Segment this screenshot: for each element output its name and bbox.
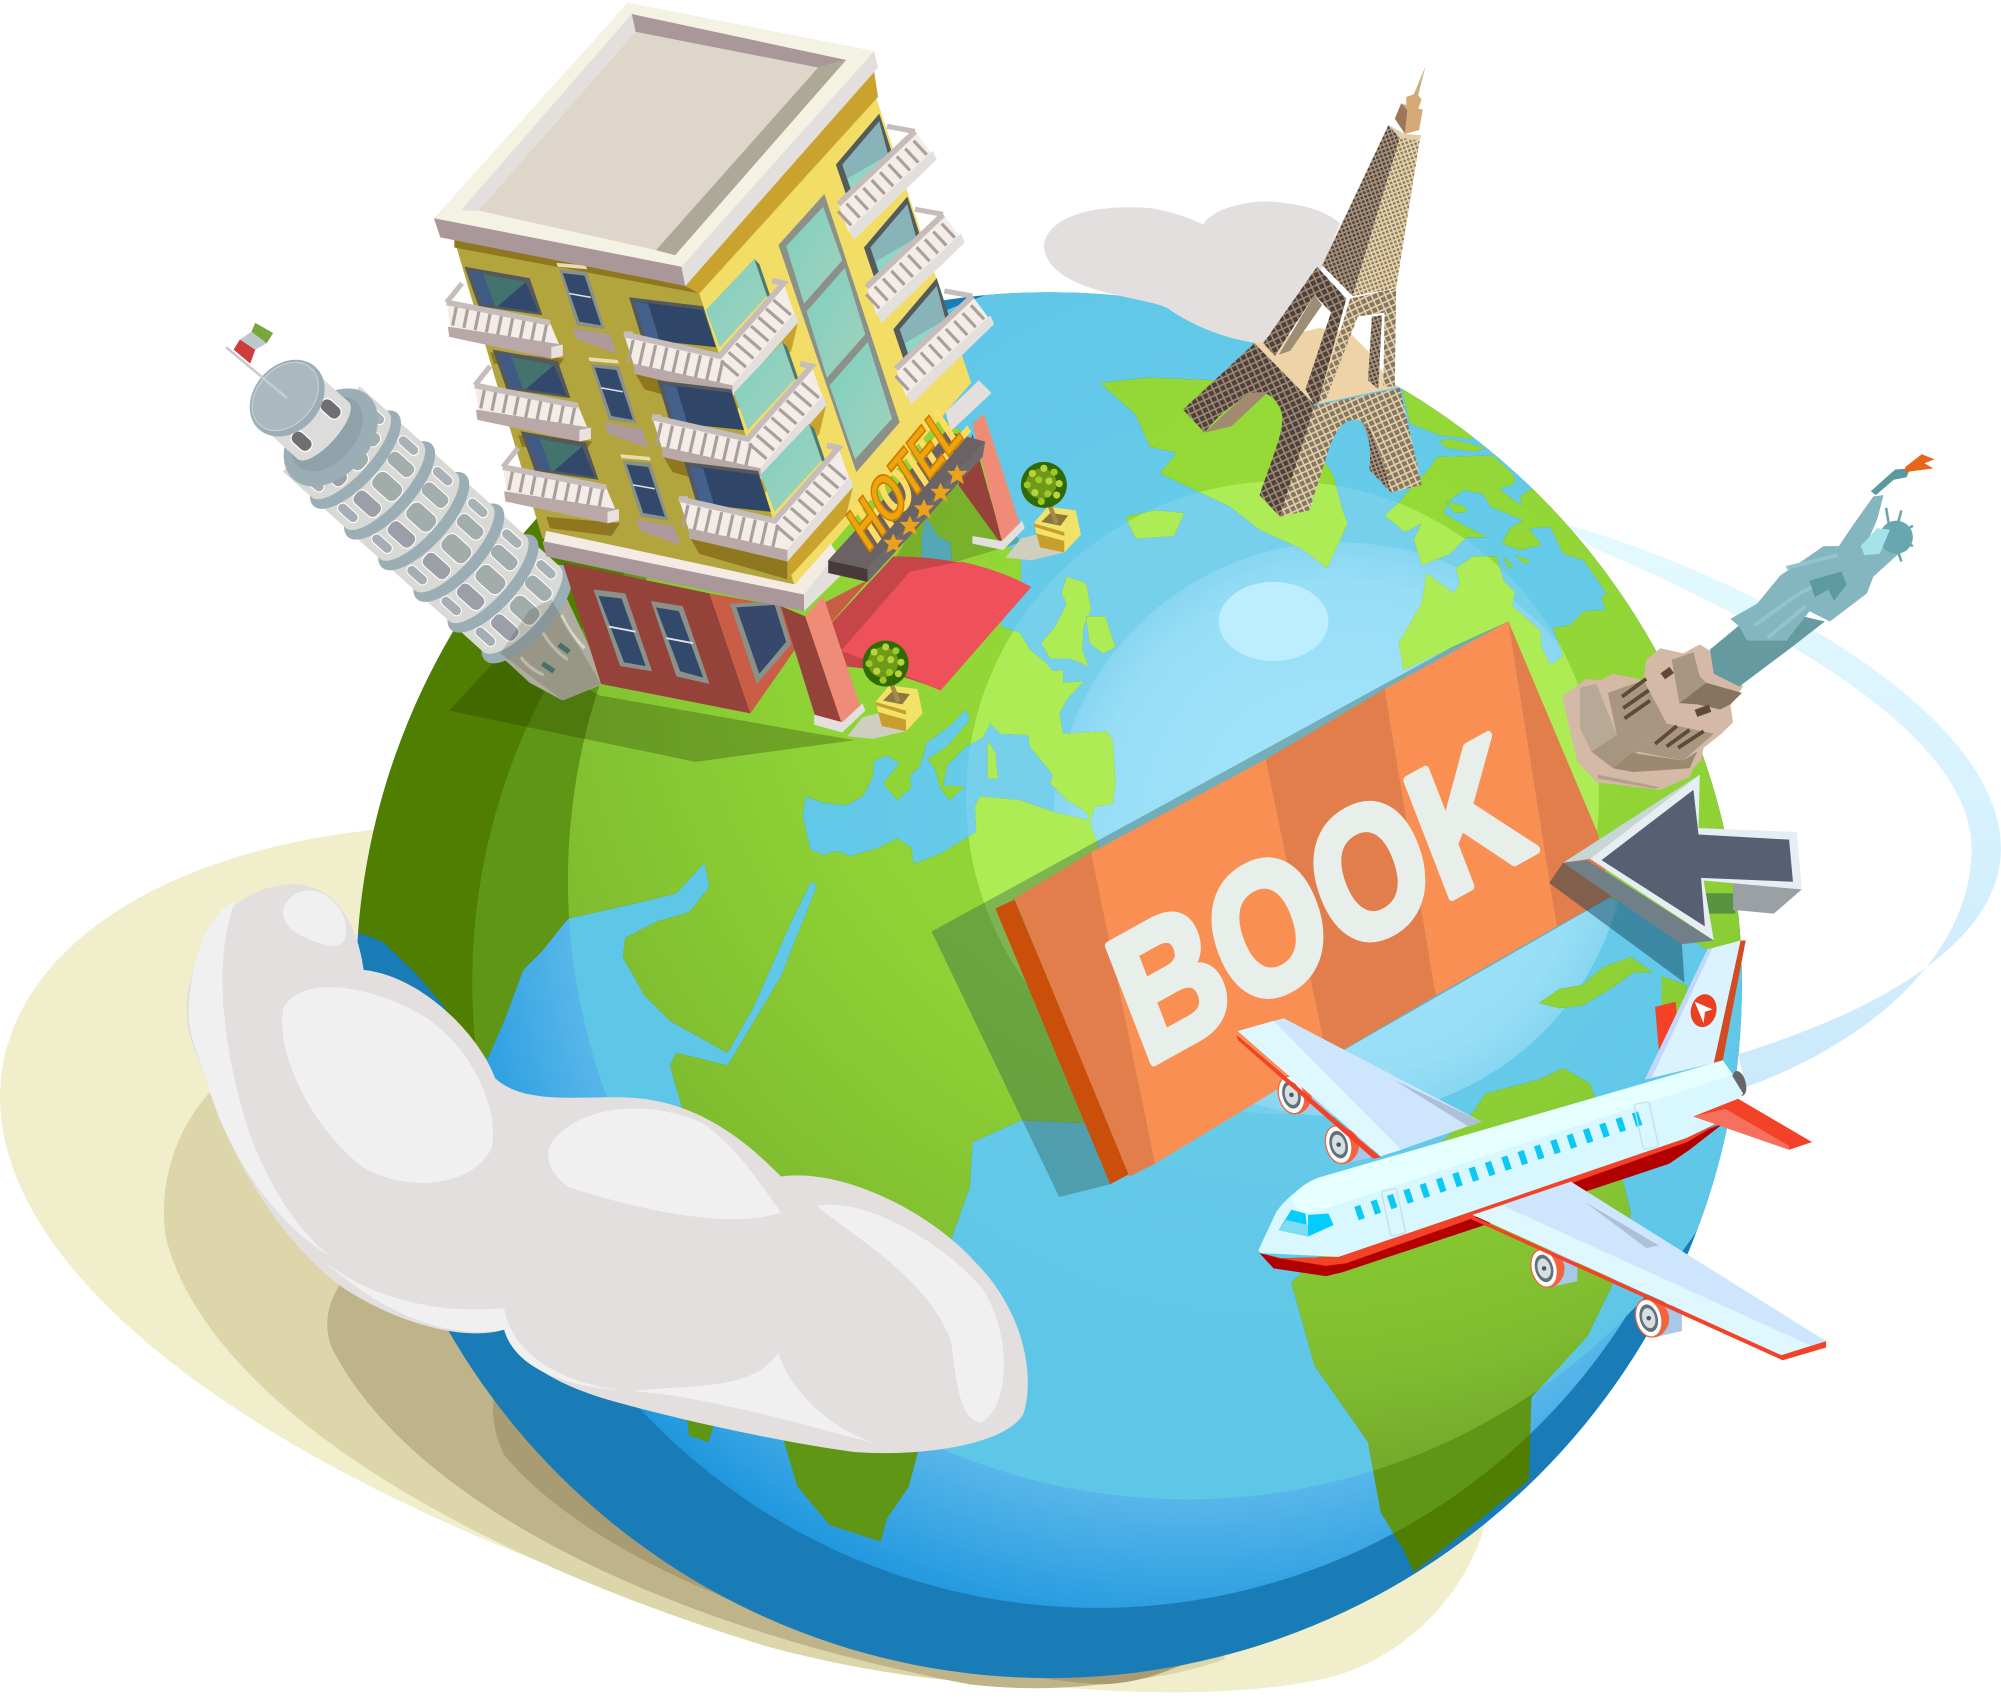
arrow face xyxy=(1590,775,1802,940)
upper floors left wall xyxy=(454,240,795,587)
eave shadow xyxy=(685,71,878,293)
roof top edge xyxy=(434,3,874,267)
roof inner wall left xyxy=(461,14,636,211)
right stabilizer xyxy=(1693,1099,1812,1150)
summit platform xyxy=(1388,125,1422,140)
continents xyxy=(358,378,1740,1572)
tail fin xyxy=(1645,940,1746,1080)
tail cone xyxy=(1730,1069,1749,1097)
mid-floor trim xyxy=(542,380,992,611)
tower galleries xyxy=(279,382,587,677)
tower top ring xyxy=(265,370,397,505)
pedestal base xyxy=(1562,644,1743,790)
near wing xyxy=(1470,1182,1826,1360)
rear pillar xyxy=(958,413,1025,550)
side balconies xyxy=(836,114,994,405)
cloud highlights xyxy=(189,891,1004,1445)
arrow sides xyxy=(1563,775,1802,944)
roof front edge xyxy=(434,218,685,286)
narrow windows xyxy=(556,263,680,545)
roof inner shadow xyxy=(656,60,846,255)
tower body xyxy=(221,329,587,677)
inner arch lower xyxy=(1362,421,1391,493)
book spine xyxy=(995,900,1129,1184)
front pillar xyxy=(781,596,865,732)
cloud body xyxy=(186,884,1028,1453)
corner balconies xyxy=(624,259,854,579)
engines on near wing xyxy=(1527,1247,1682,1340)
antenna xyxy=(1413,66,1425,97)
ground floor right wall xyxy=(710,593,795,713)
airplane xyxy=(1237,940,1826,1360)
Eiffel tower xyxy=(1183,66,1425,517)
ground shadow xyxy=(0,829,1487,1692)
far wing xyxy=(1237,1018,1482,1159)
tablet xyxy=(1810,572,1847,601)
engines on far wing xyxy=(1274,1073,1372,1166)
torch xyxy=(1871,468,1910,495)
roof side edge xyxy=(681,51,878,286)
upper floors right wall xyxy=(699,80,971,587)
summit blocks xyxy=(1395,93,1423,134)
shaft right face xyxy=(1353,137,1420,296)
first platform xyxy=(1254,328,1400,405)
potted tree left xyxy=(847,641,923,739)
ocean highlight xyxy=(1219,582,1328,661)
cabin windows xyxy=(1357,1115,1649,1214)
front cloud xyxy=(186,884,1028,1453)
leaning tower of Pisa xyxy=(221,329,606,701)
sign stars xyxy=(883,464,967,553)
roof floor xyxy=(479,32,818,250)
roof inner wall back xyxy=(632,14,846,68)
orbit ring xyxy=(1567,524,2001,1087)
fuselage xyxy=(1258,1060,1743,1257)
belfry xyxy=(234,345,362,471)
doors xyxy=(1381,1101,1658,1236)
arrow shadow xyxy=(1549,863,1736,983)
left leg lower xyxy=(1183,343,1314,517)
book cover bands xyxy=(1015,852,1155,1177)
shaft left face xyxy=(1322,125,1400,296)
robe xyxy=(1730,495,1901,641)
book xyxy=(995,621,1610,1184)
globe xyxy=(345,262,1806,1697)
left arch underside xyxy=(1205,392,1268,433)
left balconies xyxy=(447,267,620,536)
upper arch underside xyxy=(1279,295,1322,355)
upper front leg xyxy=(1305,299,1346,405)
shadow over tower base xyxy=(500,600,601,701)
hotel sign xyxy=(837,383,979,566)
belly xyxy=(1260,1120,1724,1276)
ground floor windows xyxy=(593,590,791,684)
entrance canopy xyxy=(828,431,985,582)
tall window xyxy=(778,194,900,472)
shadow of hotel on globe xyxy=(449,475,1021,762)
right leg lower xyxy=(1280,388,1422,517)
upper right face xyxy=(1318,288,1396,403)
tower base xyxy=(498,587,606,701)
tail stabilizer rear xyxy=(1655,1002,1677,1051)
head and crown xyxy=(1861,508,1913,561)
robe folds xyxy=(1755,555,1838,638)
flag of Italy xyxy=(226,323,287,398)
potted tree right xyxy=(1006,462,1081,560)
cursor arrow xyxy=(1549,775,1802,983)
red carpet xyxy=(810,556,1031,690)
flame xyxy=(1905,454,1935,472)
upper left leg xyxy=(1263,267,1346,356)
back cloud xyxy=(1044,201,1340,343)
hotel sign: HOTEL xyxy=(837,391,972,566)
hotel xyxy=(434,3,994,732)
ocean layers xyxy=(345,262,1806,1697)
hotel sign: HOTEL xyxy=(845,383,979,558)
statue of liberty xyxy=(1562,454,1935,790)
shadow of book on globe xyxy=(932,621,1610,1197)
ground floor left wall xyxy=(563,563,750,713)
book title: BOOK xyxy=(1086,697,1552,1103)
statue pedestal xyxy=(1710,613,1825,687)
cockpit xyxy=(1279,1210,1334,1237)
rear right leg upper xyxy=(1368,315,1382,389)
